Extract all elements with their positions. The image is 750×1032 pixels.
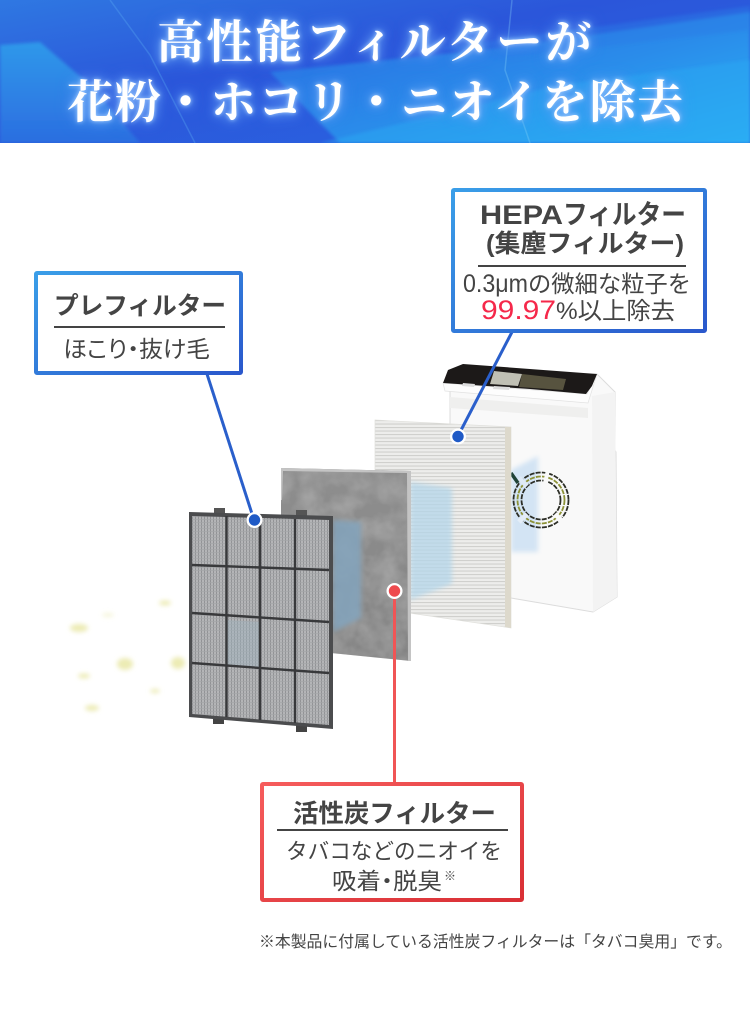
- callout: HEPA filter: (集塵フィルター): [486, 230, 684, 258]
- callout: HEPA filter: 99.97: [481, 295, 556, 325]
- callout: HEPA filter: HEPA: [480, 200, 563, 230]
- callout: activated carbon filter: [262, 784, 522, 900]
- callout: HEPA filter: %以上除去: [556, 298, 675, 325]
- callout: activated carbon filter: ※: [444, 869, 456, 883]
- header banner: [0, 0, 750, 143]
- callout: HEPA filter: [453, 190, 705, 331]
- leader line and dot: HEPA: [450, 332, 512, 444]
- leader line and dot: pre-filter: [207, 374, 262, 528]
- HEPA filter panel: [375, 420, 511, 628]
- pre-filter panel: [189, 508, 333, 732]
- title line 2: 花粉・ホコリ・ニオイを除去: [67, 77, 685, 128]
- purifier airflow glow: [511, 456, 538, 552]
- air purifier: [443, 364, 617, 612]
- callout: activated carbon filter: 活性炭フィルター: [293, 800, 496, 828]
- callout: activated carbon filter: タバコなどのニオイを: [286, 839, 502, 864]
- callout: HEPA filter: の微細な粒子を: [528, 271, 691, 297]
- callout: HEPA filter: フィルター: [563, 200, 686, 230]
- purifier control panel: [443, 364, 597, 394]
- callout: pre-filter: ほこり・抜け毛: [63, 336, 210, 362]
- leader line and dot: charcoal: [386, 583, 402, 783]
- callout: pre-filter: プレフィルター: [54, 292, 226, 320]
- pollen particles: [70, 600, 185, 711]
- callout: HEPA filter: 0.3μm: [463, 270, 528, 298]
- title line 1: 高性能フィルターが: [157, 17, 595, 68]
- callout: activated carbon filter: 吸着・脱臭: [332, 868, 442, 894]
- footnote: ※本製品に付属している活性炭フィルターは「タバコ臭用」です。: [259, 933, 732, 951]
- purifier fan: [511, 470, 568, 528]
- callout: pre-filter: [36, 273, 241, 373]
- charcoal filter panel: [281, 468, 411, 661]
